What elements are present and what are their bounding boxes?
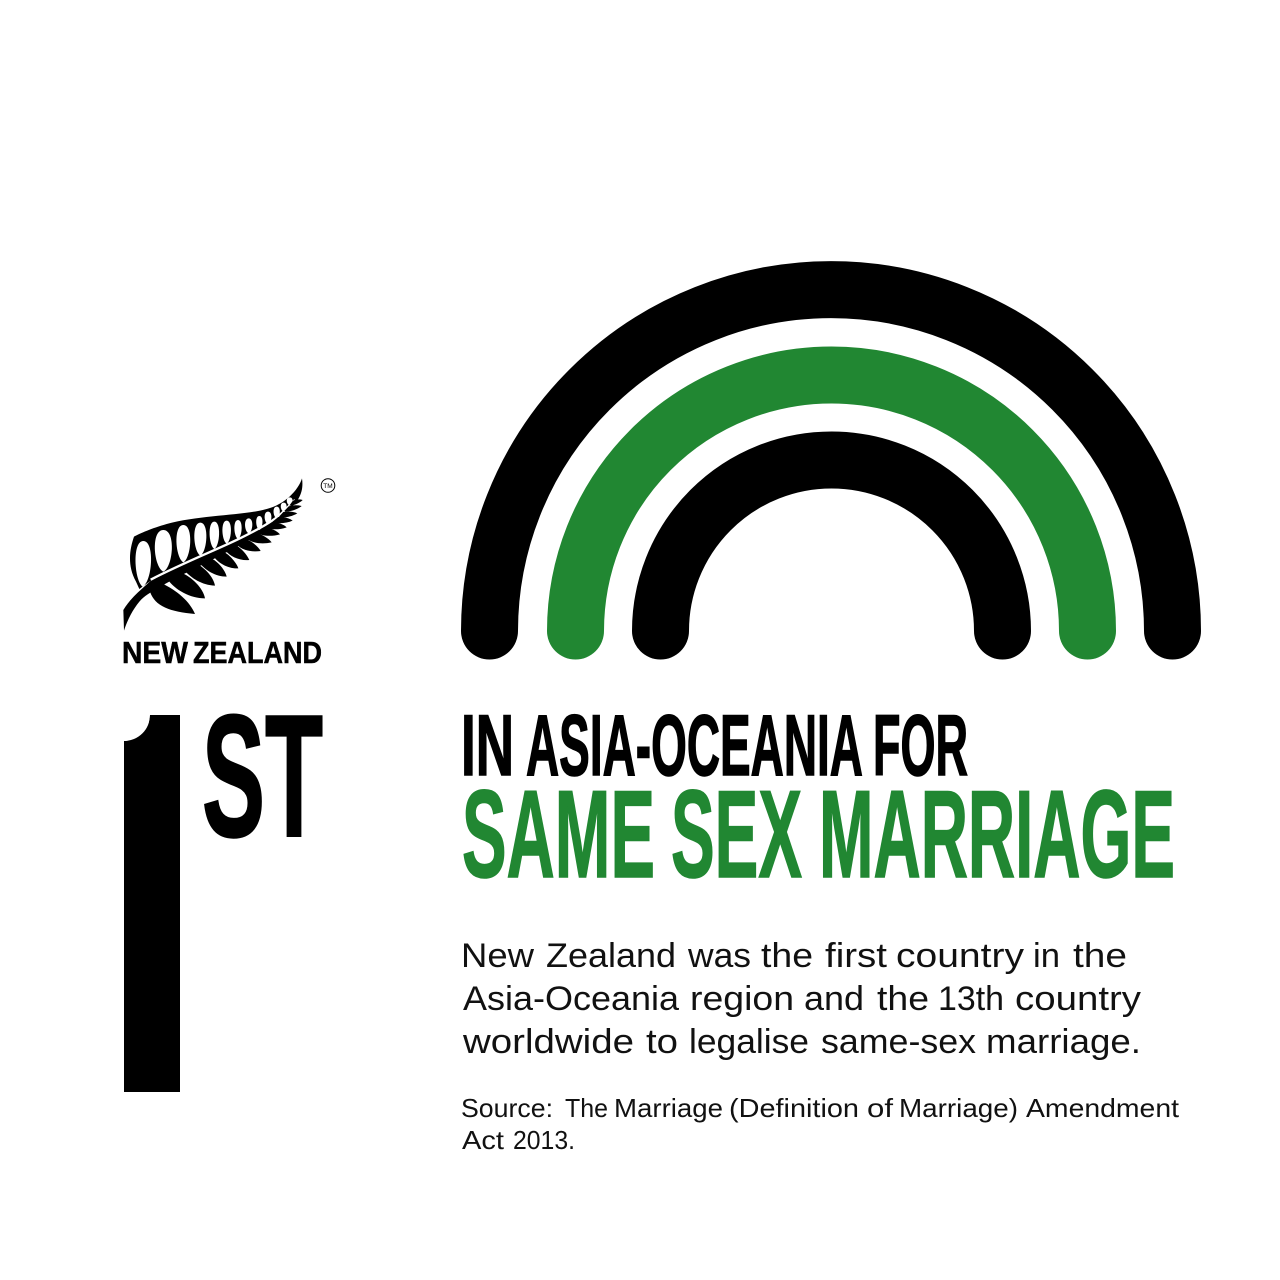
body text: New bbox=[461, 937, 534, 975]
outer black arch bbox=[490, 290, 1172, 631]
body text: country bbox=[896, 937, 1024, 975]
source note: Marriage bbox=[614, 1093, 723, 1123]
body text: 13th bbox=[938, 980, 1004, 1018]
source note: Act bbox=[462, 1125, 505, 1155]
numeral 1: 1 bbox=[28, 596, 257, 1209]
logo wordmark: NEW bbox=[122, 635, 189, 670]
body text: in bbox=[1033, 937, 1060, 975]
body text: the bbox=[761, 937, 813, 975]
body text: the bbox=[877, 980, 929, 1018]
heading line 1: FOR bbox=[873, 698, 968, 794]
heading line 1: IN bbox=[461, 698, 514, 794]
body text: worldwide bbox=[462, 1023, 634, 1061]
logo wordmark bbox=[122, 635, 322, 670]
heading line 2 bbox=[462, 766, 1175, 904]
source note: 2013. bbox=[513, 1125, 575, 1155]
body text: the bbox=[1073, 937, 1127, 975]
infographic bbox=[123, 261, 1201, 1150]
source note: The bbox=[565, 1093, 608, 1123]
logo wordmark: ZEALAND bbox=[193, 635, 322, 670]
body text: and bbox=[804, 980, 864, 1018]
source note: Marriage) bbox=[899, 1093, 1018, 1123]
trademark mark bbox=[321, 479, 335, 492]
heading bbox=[461, 698, 1175, 904]
source note: Source: bbox=[461, 1093, 553, 1123]
inner black arch bbox=[660, 460, 1002, 631]
body text: legalise bbox=[689, 1023, 809, 1061]
source note: (Definition bbox=[729, 1093, 859, 1123]
body text: region bbox=[690, 980, 794, 1018]
ordinal suffix ST: T bbox=[265, 678, 323, 873]
body text: Zealand bbox=[546, 937, 676, 975]
heading line 1: ASIA-OCEANIA bbox=[526, 698, 863, 794]
chart: three rainbow arches bbox=[490, 290, 1172, 631]
body text: to bbox=[646, 1023, 678, 1061]
source note: Amendment bbox=[1026, 1093, 1180, 1123]
source note bbox=[461, 1093, 1180, 1155]
heading line 2: SEX bbox=[671, 766, 802, 904]
big numeral: 1st bbox=[124, 714, 323, 1092]
heading line 1 bbox=[461, 698, 968, 794]
body text: was bbox=[687, 937, 751, 975]
logo: New Zealand silver fern bbox=[122, 478, 335, 670]
source note: of bbox=[867, 1093, 894, 1123]
body text: country bbox=[1015, 980, 1141, 1018]
heading line 2: SAME bbox=[462, 766, 655, 904]
body text: marriage. bbox=[986, 1023, 1141, 1061]
body text bbox=[461, 937, 1141, 1061]
middle green arch bbox=[576, 375, 1088, 631]
trademark mark: TM bbox=[323, 483, 333, 490]
icon: fern bbox=[123, 478, 303, 631]
body text: first bbox=[825, 937, 888, 975]
ordinal suffix ST: S bbox=[202, 678, 265, 873]
body text: Asia-Oceania bbox=[463, 980, 679, 1018]
body text: same-sex bbox=[821, 1023, 976, 1061]
